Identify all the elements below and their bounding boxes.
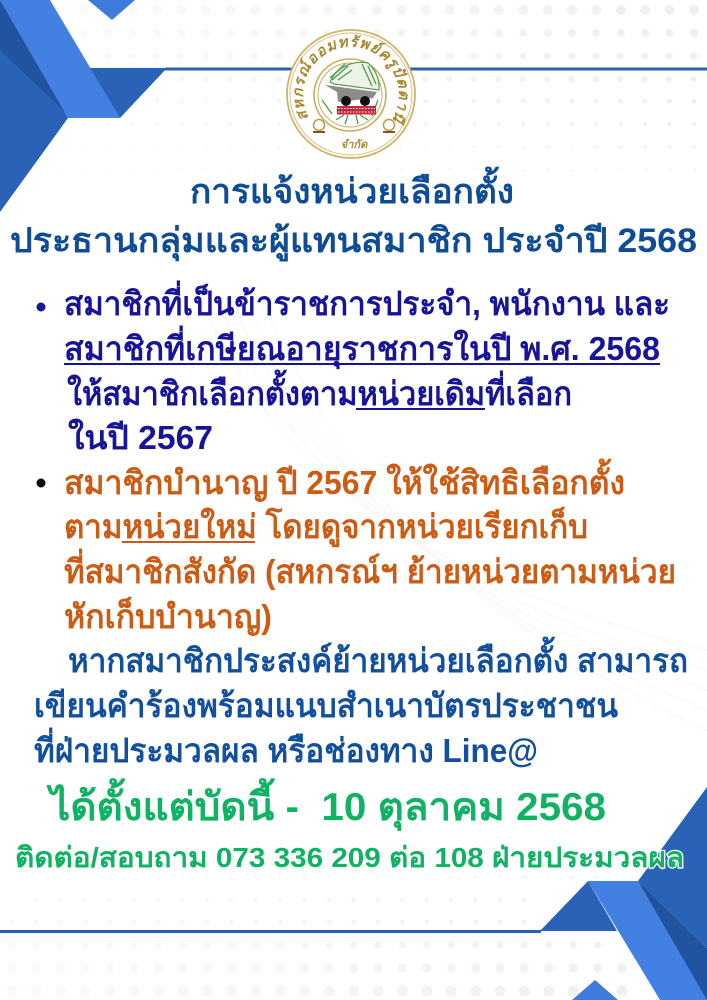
bullet 2: pension members — [36, 458, 676, 636]
logo: cooperative seal — [286, 29, 416, 159]
paragraph: how to change voting unit: เขียนคำร้องพร้อมแนบสำเนาบัตรประชาชน — [34, 687, 618, 724]
bottom rule — [0, 930, 541, 933]
paragraph: how to change voting unit: ที่ฝ่ายประมวลผล หรือช่องทาง Line@ — [34, 727, 538, 769]
logo: cooperative seal: จำกัด — [341, 138, 368, 151]
paragraph: how to change voting unit — [34, 636, 688, 769]
bullet 1: civil servants and retirees: สมาชิกที่เกษียณอายุราชการในปี พ.ศ. 2568 — [64, 325, 660, 370]
bottom-right corner shapes — [540, 787, 707, 1000]
top rule — [165, 68, 707, 70]
title: ประธานกลุ่มและผู้แทนสมาชิก ประจำปี 2568 — [10, 222, 697, 262]
paragraph: how to change voting unit: หากสมาชิกประสงค์ย้ายหน่วยเลือกตั้ง สามารถ — [68, 636, 688, 679]
bullet 2: pension members: สมาชิกบำนาญ ปี 2567 ให้ใช้สิทธิเลือกตั้ง — [64, 458, 625, 502]
title — [10, 166, 697, 262]
bullet 2: pension members: ตามหน่วยใหม่ โดยดูจากหน่วยเรียกเก็บ — [64, 506, 588, 548]
logo: cooperative seal: สหกรณ์ออมทรัพย์ครูปัตตานี — [294, 34, 408, 126]
contact line: ติดต่อ/สอบถาม 073 336 209 ต่อ 108 ฝ่ายประมวลผล — [15, 842, 684, 873]
bullet 1: civil servants and retirees: ในปี 2567 — [68, 418, 213, 456]
bullet 1: civil servants and retirees: ให้สมาชิกเลือกตั้งตามหน่วยเดิมที่เลือก — [67, 369, 572, 412]
title: การแจ้งหน่วยเลือกตั้ง — [190, 166, 514, 211]
bullet 1: civil servants and retirees — [36, 280, 670, 456]
bullet 2: pension members: หักเก็บบำนาญ) — [64, 596, 272, 636]
bullet 2: pension members: ที่สมาชิกสังกัด (สหกรณ์ฯ ย้ายหน่วยตามหน่วย — [64, 548, 676, 590]
deadline: ได้ตั้งแต่บัดนี้ - 10 ตุลาคม 2568 — [46, 778, 606, 831]
top-left corner shapes — [0, 0, 167, 212]
bullet 1: civil servants and retirees: สมาชิกที่เป็นข้าราชการประจำ, พนักงาน และ — [64, 280, 670, 322]
